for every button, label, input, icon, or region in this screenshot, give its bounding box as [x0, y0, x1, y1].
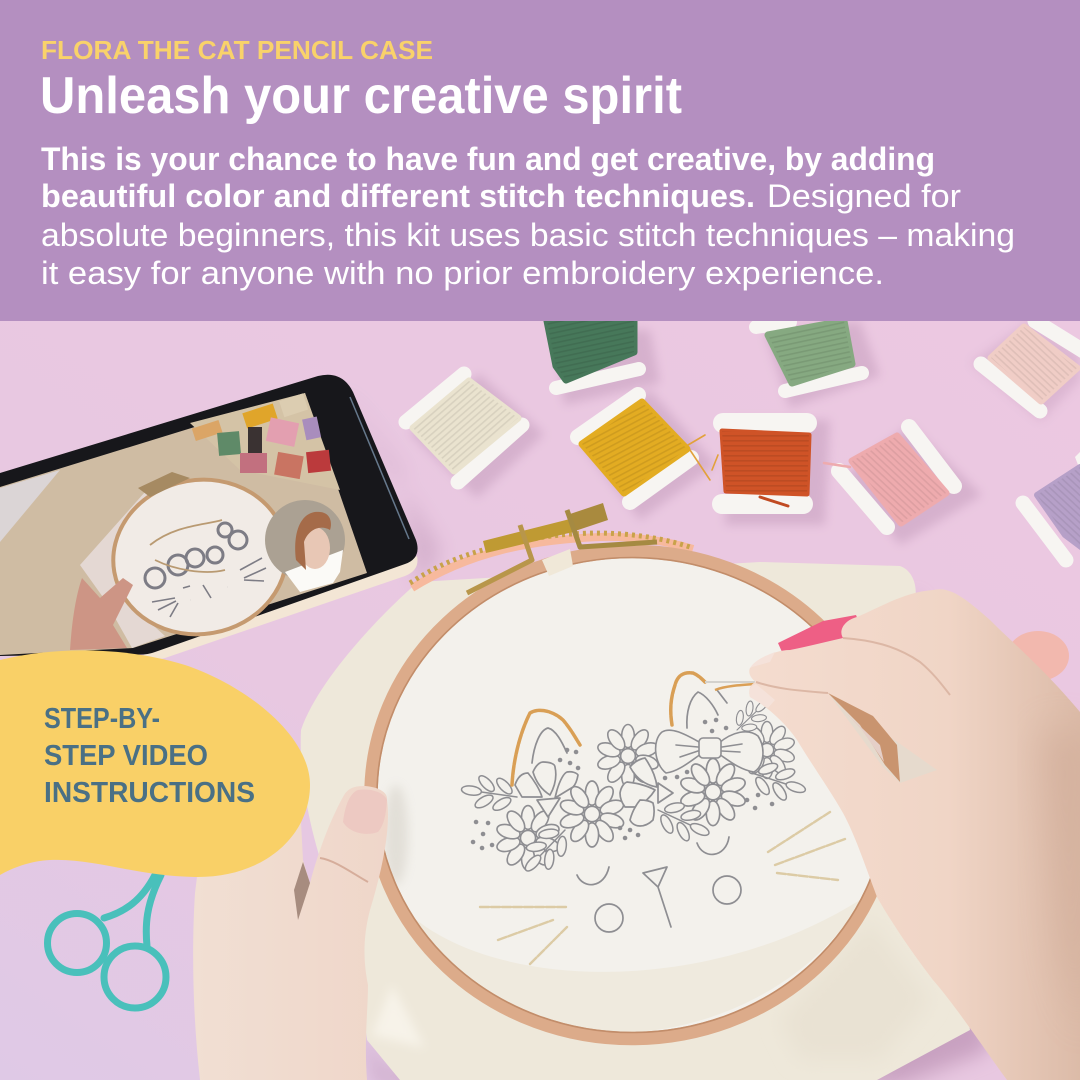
gold thread — [715, 684, 755, 690]
phone screen — [0, 393, 367, 655]
thread card: sage green — [756, 321, 880, 408]
body text: Designed for — [767, 178, 961, 214]
thread card: dark green — [547, 321, 660, 405]
thread card: burnt orange — [722, 420, 830, 525]
orange zipper tape — [412, 537, 693, 588]
needle — [705, 681, 755, 683]
right bracket — [567, 510, 657, 547]
cat nose — [643, 867, 671, 927]
screen: hand — [70, 578, 133, 650]
screen: fabric drape — [80, 492, 170, 648]
lower cloth band — [400, 900, 860, 1033]
cloth in hoop — [376, 557, 888, 1033]
phone showing video — [0, 375, 440, 660]
case body — [301, 562, 970, 1080]
hand shape — [749, 589, 1080, 1080]
pink thimble — [778, 615, 858, 652]
phone rim highlight — [350, 397, 409, 539]
cat cheek left — [595, 904, 623, 932]
screen: flower sketch — [145, 520, 266, 617]
thread card: rose pink — [824, 425, 982, 545]
flower crown — [459, 691, 811, 883]
thread card: mustard yellow — [578, 390, 718, 520]
phone cream edge — [140, 556, 418, 660]
cat ears stitched in gold — [512, 673, 727, 785]
screen: colour swatches — [192, 393, 331, 479]
cat embroidery — [459, 673, 845, 964]
thumb crease — [320, 858, 368, 882]
finger crevice — [294, 862, 310, 920]
phone shadow — [340, 385, 440, 590]
hand right shade — [1040, 730, 1080, 1040]
header panel — [0, 0, 1080, 321]
body text: absolute beginners, this kit uses basic stitch techniques – making — [41, 217, 1015, 253]
cloth seen through gap — [845, 712, 884, 762]
right tulip bloom — [620, 758, 673, 826]
thread cards — [406, 321, 1080, 560]
screen: cloth top left — [0, 470, 60, 542]
screen: presenter portrait — [265, 500, 345, 592]
hoop and zipper — [371, 503, 893, 1038]
callout text: INSTRUCTIONS — [44, 777, 255, 809]
title: Unleash your creative spirit — [40, 67, 682, 125]
pink tabletop background — [0, 321, 1080, 1080]
callout text: STEP VIDEO — [44, 740, 208, 772]
thumb shadow on cloth — [384, 785, 408, 885]
fingernails — [749, 652, 775, 708]
body text — [41, 141, 1015, 291]
wooden outer hoop — [371, 552, 893, 1038]
cat cheek right — [713, 876, 741, 904]
thread card: light pink — [971, 321, 1080, 421]
screen: hoop — [101, 466, 299, 648]
left tulip bloom — [515, 762, 578, 817]
finger creases — [756, 638, 950, 695]
zipper teeth — [410, 533, 693, 583]
case shadow — [360, 596, 990, 1080]
whisker stitches — [480, 812, 845, 964]
yellow callout blob — [0, 650, 310, 877]
hoop gap — [542, 549, 573, 576]
thread card: lilac — [1023, 452, 1080, 560]
body text: This is your chance to have fun and get creative, by adding — [41, 141, 935, 177]
case fold highlight — [372, 985, 425, 1048]
thread card: cream — [406, 374, 544, 498]
thumbnail — [343, 789, 387, 834]
case fold shade — [780, 920, 930, 1060]
left hand holding hoop — [193, 786, 388, 1080]
cat eyes — [577, 837, 729, 885]
brass screw — [483, 519, 573, 553]
screen: hoop clasp — [138, 472, 190, 497]
phone body — [0, 375, 418, 656]
screen: swatch table area — [190, 393, 340, 490]
body text: beautiful color and different stitch techniques. — [41, 178, 755, 214]
pink floss — [1007, 631, 1069, 681]
icon: teal scissors — [48, 875, 166, 1008]
screw knurled head — [570, 503, 608, 531]
eyebrow heading: FLORA THE CAT PENCIL CASE — [41, 35, 433, 65]
left bracket — [467, 525, 532, 593]
right hand with needle — [705, 589, 1080, 1080]
callout text — [44, 703, 255, 809]
body text: it easy for anyone with no prior embroidery experience. — [41, 255, 884, 291]
callout text: STEP-BY- — [44, 703, 160, 735]
hoop inner edge — [377, 558, 887, 1032]
gap between fingers — [828, 693, 937, 783]
canvas pencil case — [301, 562, 990, 1080]
hoop seen through gap — [828, 693, 900, 782]
